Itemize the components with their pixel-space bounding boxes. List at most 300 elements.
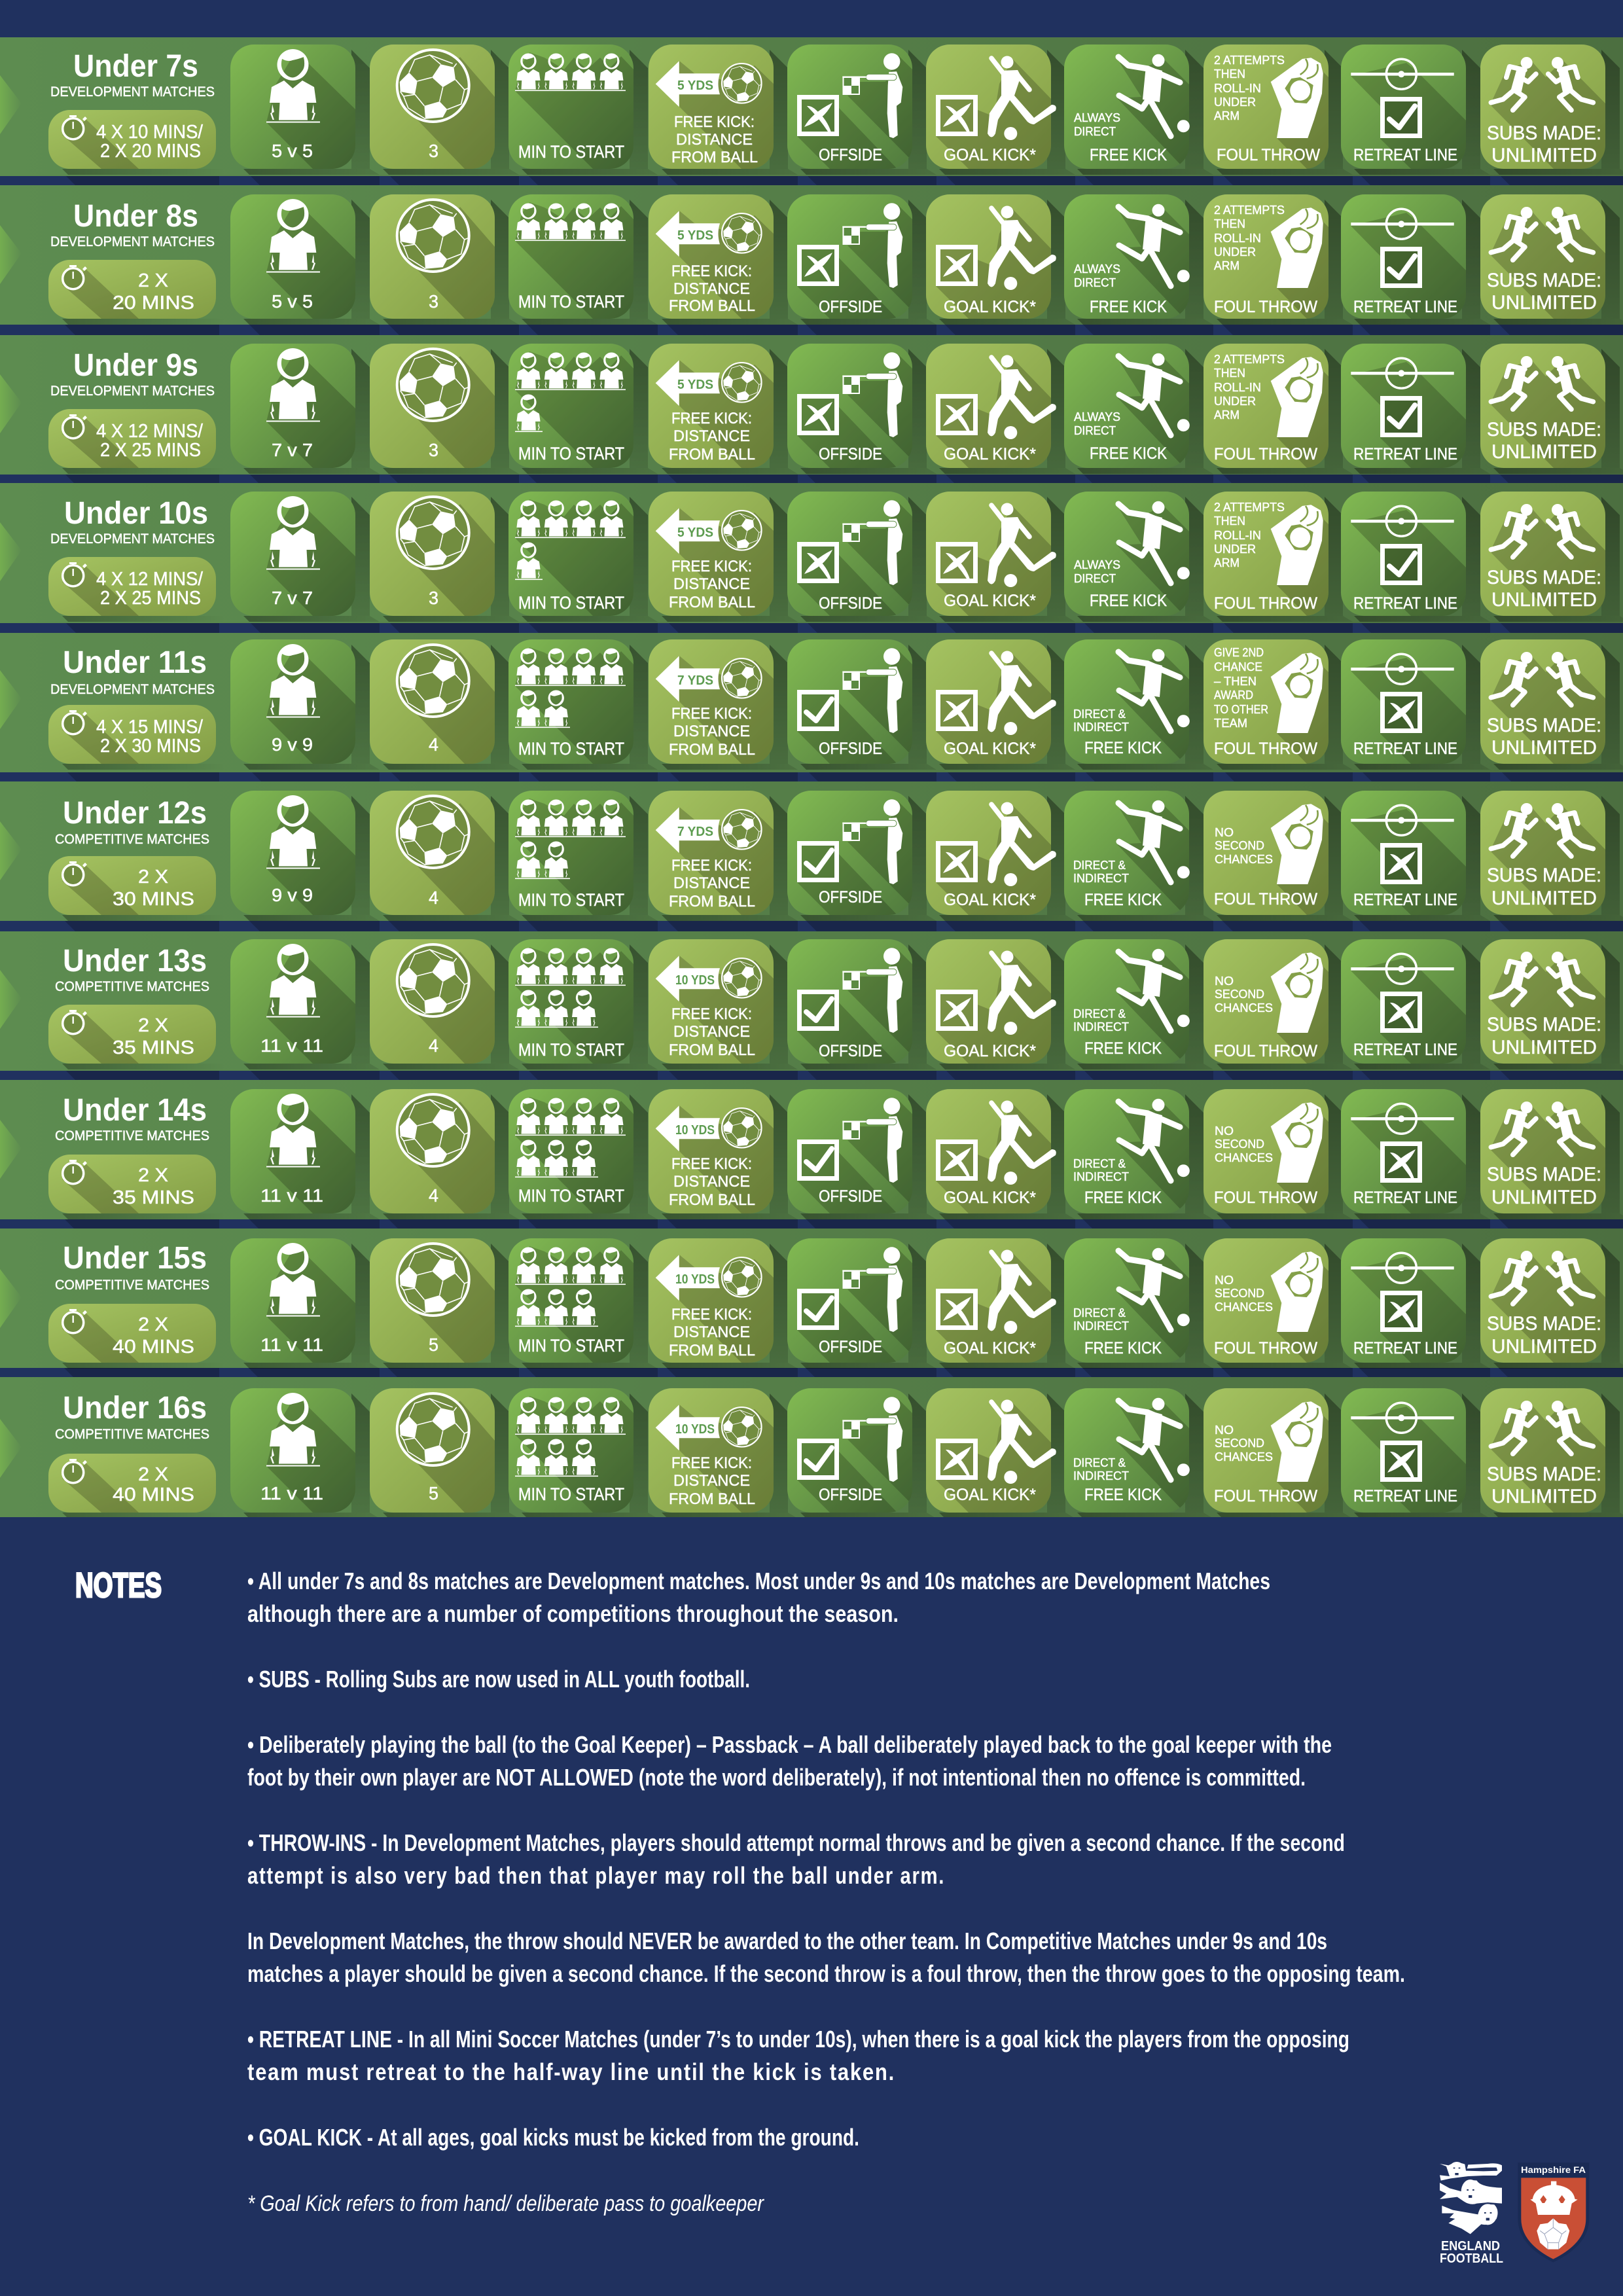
card: free kick distance: FROM BALL [669,1041,755,1059]
time pill: 35 MINS [113,1187,194,1208]
card: retreat line: RETREAT LINE [1353,1339,1457,1357]
card: free kick: FREE KICK [1090,444,1167,463]
card: substitutions: SUBS MADE: [1487,1313,1601,1335]
card: goal kick [926,45,1056,169]
time pill [48,1304,216,1363]
card: players: 11 v 11 [260,1035,323,1056]
heading: age group: Under 12s [63,796,207,831]
card: foul throw: CHANCE [1214,660,1262,673]
card: free kick: DIRECT & [1073,1157,1126,1170]
card: foul throw: FOUL THROW [1214,1042,1317,1060]
card: foul throw [1204,45,1329,169]
card: free kick distance [649,1388,774,1513]
card: ball size: 5 [429,1335,438,1355]
text block: notes: attempt is also very bad then that player may roll the ball under arm. [247,1862,945,1889]
heading: age group: Under 11s [63,645,207,680]
time pill: 2 X 25 MINS [100,440,201,461]
card: free kick distance [649,939,774,1064]
card: minimum to start: MIN TO START [518,292,624,312]
card: free kick distance: DISTANCE [673,1173,750,1191]
card: minimum to start: MIN TO START [518,1040,624,1060]
card: free kick distance: FROM BALL [669,297,755,315]
card: foul throw: NO [1215,974,1234,988]
subheading: match type: DEVELOPMENT MATCHES [50,531,215,547]
card: free kick: DIRECT & [1073,858,1126,872]
card: free kick distance: DISTANCE [673,874,750,892]
card: offside: OFFSIDE [819,1042,882,1060]
card: free kick [1064,1238,1190,1363]
card: free kick: INDIRECT [1073,1170,1129,1183]
card: foul throw [1204,939,1329,1064]
card: free kick distance: DISTANCE [673,575,750,593]
card: foul throw: SECOND [1215,1436,1264,1450]
card: offside: OFFSIDE [819,740,882,758]
subheading: match type: DEVELOPMENT MATCHES [50,682,215,697]
card: foul throw: FOUL THROW [1214,445,1317,463]
text block: notes: * Goal Kick refers to from hand/ deliberate pass to goalkeeper [247,2191,764,2216]
card: foul throw: AWARD [1214,688,1253,702]
card: minimum to start [508,344,633,468]
card: offside: OFFSIDE [819,888,882,906]
card: players: 9 v 9 [272,885,313,905]
card: foul throw: ARM [1214,556,1240,569]
card: offside: OFFSIDE [819,146,882,164]
card: retreat line: RETREAT LINE [1353,146,1457,164]
row: Under 7s [0,37,1623,202]
card: free kick: DIRECT [1074,423,1116,437]
time pill [48,705,216,764]
time pill [48,1155,216,1213]
heading: age group: Under 10s [64,496,208,531]
card: players: 9 v 9 [272,734,313,755]
card: ball size [370,1089,495,1213]
card: foul throw [1204,1089,1329,1213]
card: substitutions [1480,1388,1605,1513]
card: substitutions: SUBS MADE: [1487,865,1601,886]
card: free kick: ALWAYS [1074,111,1120,124]
card: free kick [1064,194,1190,319]
card: players [230,1238,355,1363]
time pill: 2 X [138,1464,168,1485]
card: ball size: 4 [429,1185,438,1206]
text block: notes: • RETREAT LINE - In all Mini Soccer Matches (under 7’s to under 10s), when there is a goal kick the players from the opposing [247,2026,1349,2053]
card: substitutions: UNLIMITED [1491,292,1597,314]
subheading: match type: DEVELOPMENT MATCHES [50,234,215,249]
card: minimum to start: MIN TO START [518,1336,624,1355]
card: free kick distance: 10 YDS [675,973,715,988]
time pill: 2 X 30 MINS [100,736,201,757]
card: free kick distance: FREE KICK: [671,262,752,280]
card: free kick: INDIRECT [1073,1469,1129,1482]
card: goal kick: GOAL KICK* [944,1042,1036,1060]
card: substitutions: UNLIMITED [1491,1336,1597,1357]
card: goal kick: GOAL KICK* [944,1486,1036,1504]
card: free kick distance [649,1238,774,1363]
card: free kick distance: 5 YDS [677,79,713,93]
card: free kick [1064,639,1190,764]
card: free kick distance [649,45,774,169]
card: free kick distance: FROM BALL [669,446,755,463]
card: retreat line [1341,344,1466,468]
card: minimum to start: MIN TO START [518,444,624,463]
card: retreat line: RETREAT LINE [1353,1189,1457,1207]
card: free kick distance: DISTANCE [673,1472,750,1490]
time pill: 4 X 10 MINS/ [96,122,204,143]
card: free kick: DIRECT & [1073,1007,1126,1020]
card: players: 7 v 7 [272,440,313,460]
card: foul throw: FOUL THROW [1214,1339,1317,1357]
card: foul throw: CHANCES [1215,1450,1273,1463]
row: Under 16s [0,1377,1623,1545]
card: retreat line [1341,791,1466,915]
text block: notes: • All under 7s and 8s matches are Development matches. Most under 9s and 10s matches are Development Matches [247,1568,1270,1594]
card: offside: OFFSIDE [819,1486,882,1504]
card: players: 11 v 11 [260,1185,323,1206]
card: free kick distance: 10 YDS [675,1272,715,1287]
card: free kick: DIRECT & [1073,1306,1126,1319]
card: free kick: FREE KICK [1084,1189,1162,1207]
text block: notes: • SUBS - Rolling Subs are now used in ALL youth football. [247,1666,750,1693]
card: foul throw: NO [1215,1423,1234,1437]
text block: notes: In Development Matches, the throw should NEVER be awarded to the other team. In Competitive Matches under 9s and 10s [247,1928,1327,1954]
card: substitutions [1480,194,1605,319]
card: ball size [370,344,495,468]
panel: notes background [0,1517,1623,2296]
card: offside [787,791,912,915]
row: Under 9s [0,335,1623,501]
row: Under 13s [0,931,1623,1096]
time pill: 2 X [138,867,168,888]
card: foul throw: FOUL THROW [1217,146,1320,164]
card: goal kick [926,791,1056,915]
logo: England Football: ENGLAND [1441,2239,1500,2253]
card: retreat line [1341,1388,1466,1513]
card: ball size: 5 [429,1483,438,1503]
card: foul throw: ROLL-IN [1214,231,1261,245]
card: minimum to start [508,1238,633,1363]
text block: notes: • Deliberately playing the ball (to the Goal Keeper) – Passback – A ball deliberately played back to the goal keeper with the [247,1731,1332,1758]
card: retreat line [1341,45,1466,169]
card: goal kick [926,344,1056,468]
card: goal kick: GOAL KICK* [944,891,1036,909]
card: players [230,1388,355,1513]
card: goal kick: GOAL KICK* [944,1189,1036,1207]
card: free kick distance [649,344,774,468]
card: free kick distance: FREE KICK: [671,705,752,723]
card: free kick: FREE KICK [1084,1486,1162,1504]
logo: Hampshire FA [1518,2162,1589,2263]
card: substitutions: SUBS MADE: [1487,1463,1601,1485]
time pill [48,260,216,319]
heading: age group: Under 8s [73,199,198,234]
card: retreat line: RETREAT LINE [1353,891,1457,909]
card: free kick [1064,791,1190,915]
card: free kick: FREE KICK [1084,1039,1162,1058]
time pill [48,409,216,468]
time pill: 2 X [138,270,168,291]
card: foul throw: 2 ATTEMPTS [1214,53,1285,67]
card: substitutions: UNLIMITED [1491,145,1597,166]
card: foul throw: ROLL-IN [1214,380,1261,394]
card: retreat line [1341,492,1466,616]
row: Under 11s [0,633,1623,797]
card: players: 5 v 5 [272,291,313,312]
card: free kick distance: 10 YDS [675,1123,715,1138]
card: foul throw [1204,492,1329,616]
card: foul throw: SECOND [1215,987,1264,1001]
card: free kick distance: FROM BALL [669,1191,755,1209]
card: foul throw: UNDER [1214,542,1256,556]
card: goal kick: GOAL KICK* [944,445,1036,463]
card: ball size: 3 [429,440,438,460]
card: free kick distance: FROM BALL [669,893,755,910]
card: substitutions [1480,1238,1605,1363]
card: foul throw: GIVE 2ND [1214,645,1264,659]
card: substitutions: SUBS MADE: [1487,270,1601,291]
card: offside [787,1089,912,1213]
card: goal kick: GOAL KICK* [944,146,1036,164]
card: free kick distance: FROM BALL [671,149,758,166]
card: substitutions [1480,639,1605,764]
subheading: match type: COMPETITIVE MATCHES [55,1128,209,1143]
time pill: 2 X [138,1165,168,1186]
card: free kick distance: FROM BALL [669,1490,755,1508]
card: foul throw: CHANCES [1215,852,1273,866]
heading: notes: NOTES [75,1566,162,1605]
subheading: match type: COMPETITIVE MATCHES [55,1278,209,1293]
card: minimum to start [508,45,633,169]
card: offside [787,1238,912,1363]
card: free kick distance: DISTANCE [673,280,750,298]
card: retreat line [1341,939,1466,1064]
card: free kick: FREE KICK [1090,146,1167,164]
card: substitutions: UNLIMITED [1491,737,1597,759]
heading: age group: Under 7s [73,49,198,84]
card: free kick distance: DISTANCE [676,131,753,149]
card: foul throw: THEN [1214,217,1245,230]
card: substitutions [1480,45,1605,169]
card: foul throw [1204,1388,1329,1513]
card: substitutions [1480,791,1605,915]
card: players [230,639,355,764]
card: foul throw: FOUL THROW [1214,1189,1317,1207]
time pill: 30 MINS [113,889,194,910]
card: minimum to start: MIN TO START [518,739,624,759]
card: free kick: ALWAYS [1074,262,1120,276]
card: players: 7 v 7 [272,588,313,608]
card: substitutions: UNLIMITED [1491,1486,1597,1507]
card: minimum to start: MIN TO START [518,1186,624,1206]
card: ball size [370,45,495,169]
row: Under 8s [0,185,1623,351]
card: foul throw: UNDER [1214,394,1256,408]
card: goal kick: GOAL KICK* [944,1339,1036,1357]
time pill: 40 MINS [113,1484,194,1505]
card: minimum to start [508,791,633,915]
row: Under 12s [0,781,1623,948]
card: retreat line: RETREAT LINE [1353,1041,1457,1059]
card: substitutions: SUBS MADE: [1487,715,1601,736]
card: free kick: FREE KICK [1084,891,1162,909]
subheading: match type: COMPETITIVE MATCHES [55,832,209,847]
card: minimum to start [508,639,633,764]
card: minimum to start: MIN TO START [518,593,624,613]
card: goal kick [926,1388,1056,1513]
card: substitutions [1480,1089,1605,1213]
card: minimum to start: MIN TO START [518,890,624,910]
card: players: 5 v 5 [272,141,313,161]
subheading: match type: DEVELOPMENT MATCHES [50,384,215,399]
card: foul throw [1204,194,1329,319]
card: ball size [370,639,495,764]
time pill [48,856,216,915]
card: offside [787,639,912,764]
card: offside [787,492,912,616]
card: players [230,45,355,169]
card: free kick distance: 7 YDS [677,825,713,839]
card: free kick: ALWAYS [1074,558,1120,571]
card: foul throw: CHANCES [1215,1001,1273,1014]
card: retreat line: RETREAT LINE [1353,740,1457,758]
card: goal kick [926,1238,1056,1363]
card: offside: OFFSIDE [819,298,882,316]
card: free kick: INDIRECT [1073,1319,1129,1333]
card: minimum to start: MIN TO START [518,142,624,162]
logo: England Football [1440,2162,1503,2266]
time pill: 2 X 25 MINS [100,588,201,609]
card: substitutions: UNLIMITED [1491,888,1597,909]
card: retreat line: RETREAT LINE [1353,594,1457,613]
card: minimum to start [508,1089,633,1213]
card: foul throw: NO [1215,1124,1234,1138]
card: ball size [370,492,495,616]
card: free kick distance: FREE KICK: [671,1306,752,1323]
text block: notes: foot by their own player are NOT ALLOWED (note the word deliberately), if not intentional then no offence is committed. [247,1764,1306,1791]
card: substitutions: SUBS MADE: [1487,1164,1601,1185]
card: free kick: FREE KICK [1084,739,1162,757]
card: substitutions: UNLIMITED [1491,441,1597,463]
card: players [230,492,355,616]
time pill: 20 MINS [113,293,194,314]
card: free kick [1064,492,1190,616]
card: players [230,939,355,1064]
logo: England Football: FOOTBALL [1440,2251,1503,2266]
time pill [48,557,216,616]
card: free kick: INDIRECT [1073,720,1129,734]
card: players [230,344,355,468]
card: minimum to start [508,492,633,616]
card: foul throw: CHANCES [1215,1151,1273,1164]
card: free kick distance: 5 YDS [677,228,713,243]
card: free kick [1064,1089,1190,1213]
time pill [48,1454,216,1513]
card: free kick [1064,45,1190,169]
time pill [48,1005,216,1064]
card: ball size [370,1388,495,1513]
card: foul throw: TO OTHER [1214,702,1268,716]
card: players [230,194,355,319]
card: retreat line [1341,194,1466,319]
time pill [48,110,216,169]
card: foul throw: NO [1215,1273,1234,1287]
card: ball size [370,791,495,915]
card: ball size [370,1238,495,1363]
text block: notes: • GOAL KICK - At all ages, goal kicks must be kicked from the ground. [247,2124,859,2151]
heading: age group: Under 13s [63,944,207,978]
card: substitutions: UNLIMITED [1491,1037,1597,1058]
card: minimum to start [508,1388,633,1513]
card: free kick [1064,1388,1190,1513]
text block: notes: team must retreat to the half-way line until the kick is taken. [247,2058,895,2085]
card: free kick distance: 5 YDS [677,526,713,540]
row: Under 14s [0,1080,1623,1246]
card: free kick: DIRECT [1074,276,1116,289]
card: free kick: INDIRECT [1073,871,1129,885]
card: goal kick: GOAL KICK* [944,592,1036,610]
card: foul throw: ARM [1214,408,1240,422]
card: foul throw: SECOND [1215,1286,1264,1300]
card: free kick [1064,939,1190,1064]
card: offside: OFFSIDE [819,594,882,613]
card: free kick: FREE KICK [1090,298,1167,316]
card: offside: OFFSIDE [819,1338,882,1356]
time pill: 4 X 12 MINS/ [96,569,204,590]
card: foul throw: SECOND [1215,1137,1264,1151]
card: offside: OFFSIDE [819,445,882,463]
card: free kick distance: FREE KICK: [671,1155,752,1173]
time pill: 2 X [138,1314,168,1335]
card: free kick: FREE KICK [1084,1339,1162,1357]
card: free kick distance: FREE KICK: [671,410,752,427]
card: retreat line [1341,639,1466,764]
card: foul throw: CHANCES [1215,1300,1273,1314]
card: substitutions: SUBS MADE: [1487,419,1601,440]
subheading: match type: DEVELOPMENT MATCHES [50,84,215,99]
card: offside [787,45,912,169]
text block: notes [247,1568,1405,2216]
card: retreat line: RETREAT LINE [1353,1487,1457,1505]
time pill: 2 X 20 MINS [100,141,201,162]
card: goal kick [926,939,1056,1064]
card: foul throw: TEAM [1214,716,1247,730]
card: substitutions: SUBS MADE: [1487,1014,1601,1035]
time pill: 40 MINS [113,1336,194,1357]
card: free kick distance [649,639,774,764]
card: foul throw: ROLL-IN [1214,81,1261,95]
card: free kick [1064,344,1190,468]
card: foul throw: FOUL THROW [1214,298,1317,316]
card: retreat line: RETREAT LINE [1353,445,1457,463]
subheading: match type: COMPETITIVE MATCHES [55,1427,209,1442]
card: substitutions: UNLIMITED [1491,1187,1597,1208]
card: foul throw: UNDER [1214,245,1256,259]
card: free kick distance: DISTANCE [673,427,750,445]
card: foul throw: THEN [1214,514,1245,528]
heading: age group: Under 16s [63,1391,207,1426]
card: free kick distance: 5 YDS [677,378,713,392]
card: free kick: ALWAYS [1074,410,1120,423]
text block: notes: • THROW-INS - In Development Matches, players should attempt normal throws and be given a second chance. If the second [247,1829,1345,1856]
card: minimum to start [508,939,633,1064]
card: foul throw: 2 ATTEMPTS [1214,352,1285,366]
card: goal kick [926,194,1056,319]
card: players [230,791,355,915]
card: free kick distance: 10 YDS [675,1422,715,1437]
card: players: 11 v 11 [260,1335,323,1355]
card: goal kick: GOAL KICK* [944,740,1036,758]
card: goal kick: GOAL KICK* [944,298,1036,316]
time pill: 35 MINS [113,1037,194,1058]
